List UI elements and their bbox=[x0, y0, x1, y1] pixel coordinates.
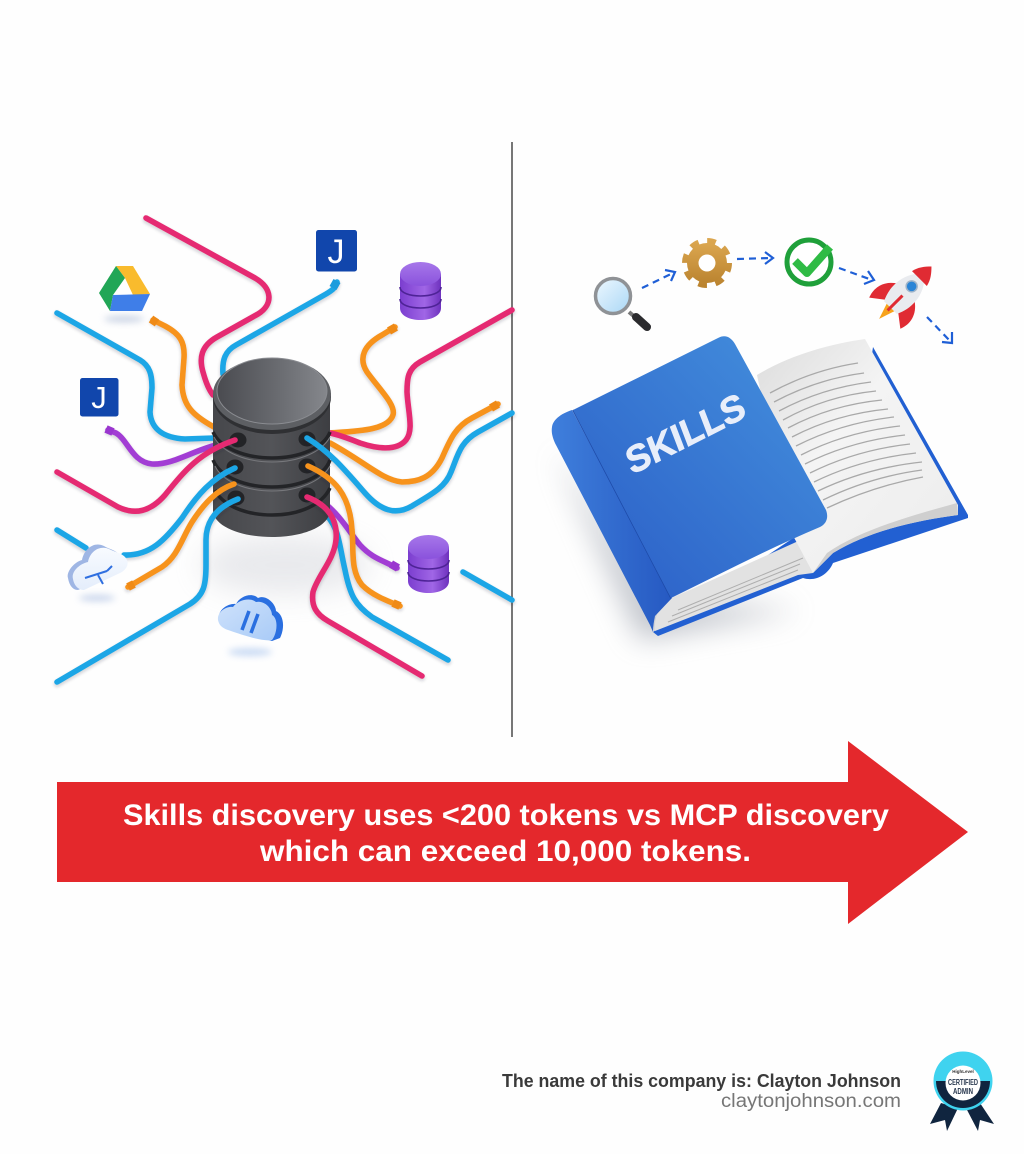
icon: rocket bbox=[862, 250, 948, 336]
divider between panels bbox=[511, 142, 513, 737]
icon: cloud left bbox=[68, 544, 128, 602]
footer website: claytonjohnson.com bbox=[721, 1091, 901, 1112]
arrow: gear to check bbox=[737, 252, 773, 264]
panel: Skills book bbox=[552, 240, 968, 640]
callout text: Skills discovery uses <200 tokens vs MCP discovery bbox=[123, 799, 889, 832]
cable: orange right bbox=[330, 404, 498, 482]
cable end caps bbox=[106, 281, 498, 606]
cable: orange upper left bbox=[153, 320, 214, 427]
cable: blue lower right bbox=[322, 510, 448, 660]
badge: certified admin: CERTIFIED bbox=[948, 1078, 978, 1087]
cable: blue right bbox=[307, 413, 512, 511]
icon: magnifying glass bbox=[596, 278, 647, 327]
database cylinder bbox=[213, 358, 331, 537]
badge: certified admin bbox=[930, 1052, 994, 1131]
badge: certified admin: HighLevel bbox=[952, 1069, 974, 1074]
cables in front of the database bbox=[57, 413, 512, 682]
front cover bbox=[573, 336, 827, 598]
icon: Jira square left: J bbox=[91, 380, 107, 415]
cable: blue right stub bbox=[463, 572, 512, 600]
icon: Google Drive bbox=[99, 266, 150, 322]
cable: orange upper right bbox=[330, 327, 395, 433]
cable: pink lower right bbox=[307, 497, 422, 676]
icon: Jira square top: J bbox=[328, 233, 344, 271]
ports bbox=[226, 432, 316, 506]
icon: green check bbox=[787, 240, 831, 284]
icon: gear bbox=[685, 241, 729, 285]
page edges left bbox=[655, 538, 813, 631]
back cover bbox=[653, 347, 968, 636]
right page bbox=[757, 339, 958, 573]
arrow: magnifier to gear bbox=[642, 270, 675, 288]
spine bbox=[552, 410, 672, 632]
cable: purple left bbox=[108, 430, 216, 464]
cable: orange lower left bbox=[128, 484, 234, 587]
badge: certified admin: ADMIN bbox=[953, 1087, 973, 1096]
top lid bbox=[213, 360, 331, 434]
cables behind the database bbox=[57, 218, 512, 660]
cable: blue to cloud bbox=[124, 468, 235, 555]
cable: blue lower left bbox=[57, 530, 86, 548]
icon: purple database top bbox=[400, 262, 441, 320]
cable: purple lower right bbox=[323, 502, 397, 568]
cable: orange lower right bbox=[308, 466, 400, 606]
cable: blue upper left bbox=[57, 313, 214, 439]
arrow: check to rocket bbox=[839, 268, 874, 284]
cable: pink left bbox=[57, 440, 235, 511]
cable: pink top bbox=[146, 218, 269, 395]
page edges right bbox=[813, 503, 958, 573]
tier grooves bbox=[213, 432, 330, 515]
database shadow bbox=[200, 535, 370, 595]
icon: Jira square top bbox=[316, 230, 357, 272]
footer company name: The name of this company is: Clayton Johnson bbox=[502, 1071, 901, 1091]
text lines on page bbox=[770, 363, 923, 508]
cable: blue long lower left bbox=[57, 499, 238, 682]
open blue skills book bbox=[552, 336, 968, 636]
cover title: SKILLS bbox=[620, 384, 751, 482]
icon: purple database bottom bbox=[408, 535, 449, 593]
red arrow callout: which can exceed 10,000 tokens. bbox=[259, 835, 751, 868]
red arrow callout bbox=[57, 741, 968, 924]
cable: blue to Jira bbox=[223, 282, 337, 374]
book shadow bbox=[556, 450, 800, 640]
icon: Jira square left bbox=[80, 378, 118, 416]
cable: pink right bbox=[330, 310, 512, 448]
panel: MCP tangled cables bbox=[57, 218, 512, 682]
arrow: rocket onward bbox=[927, 317, 952, 343]
icon: cloud bottom bbox=[218, 595, 283, 656]
